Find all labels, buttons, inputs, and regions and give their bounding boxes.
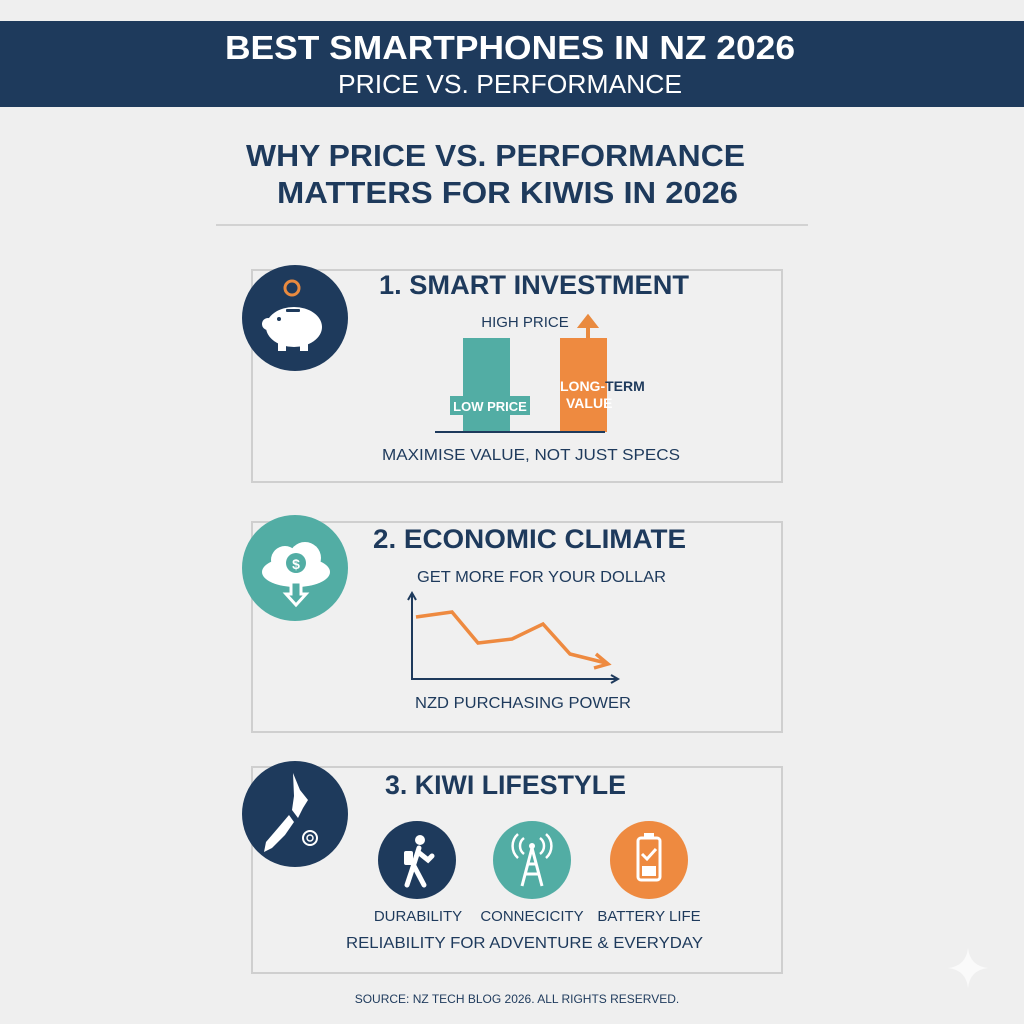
panel: kiwi lifestyle bbox=[242, 761, 782, 973]
caption: NZD PURCHASING POWER bbox=[415, 695, 631, 712]
icon labels bbox=[374, 908, 701, 925]
section heading: MATTERS FOR KIWIS IN 2026 bbox=[277, 175, 738, 210]
icon: cloud dollar bbox=[242, 515, 348, 621]
section heading bbox=[246, 138, 745, 210]
panel title: 2. ECONOMIC CLIMATE bbox=[373, 524, 686, 554]
line chart bbox=[408, 569, 666, 683]
icon labels: BATTERY LIFE bbox=[597, 908, 701, 925]
subtitle: PRICE VS. PERFORMANCE bbox=[338, 69, 682, 99]
bar chart: LOW PRICE bbox=[453, 399, 527, 414]
icon: piggy bank bbox=[242, 265, 348, 371]
icon: battery bbox=[610, 821, 688, 899]
panel: smart investment bbox=[242, 265, 782, 482]
panel title: 3. KIWI LIFESTYLE bbox=[385, 770, 626, 800]
bar chart: LONG-TERM bbox=[560, 378, 645, 394]
bar chart bbox=[435, 314, 645, 432]
section heading: WHY PRICE VS. PERFORMANCE bbox=[246, 138, 745, 173]
panel title: 1. SMART INVESTMENT bbox=[379, 270, 690, 300]
icon: durability hiker bbox=[378, 821, 456, 899]
icon: sparkle bbox=[948, 948, 988, 988]
bar chart: VALUE bbox=[566, 395, 612, 411]
icon: cloud dollar: $ bbox=[292, 556, 300, 572]
title: BEST SMARTPHONES IN NZ 2026 bbox=[225, 29, 795, 66]
panel: economic climate bbox=[242, 515, 782, 732]
footer source: SOURCE: NZ TECH BLOG 2026. ALL RIGHTS RESERVED. bbox=[355, 992, 679, 1006]
line chart: GET MORE FOR YOUR DOLLAR bbox=[417, 569, 666, 586]
bar chart: HIGH PRICE bbox=[481, 314, 569, 331]
caption: MAXIMISE VALUE, NOT JUST SPECS bbox=[382, 447, 680, 464]
icon labels: DURABILITY bbox=[374, 908, 462, 925]
header banner bbox=[0, 21, 1024, 107]
icon: connectivity tower bbox=[493, 821, 571, 899]
icon labels: CONNECICITY bbox=[480, 908, 584, 925]
icon: NZ map bbox=[242, 761, 348, 867]
caption: RELIABILITY FOR ADVENTURE & EVERYDAY bbox=[346, 935, 703, 952]
